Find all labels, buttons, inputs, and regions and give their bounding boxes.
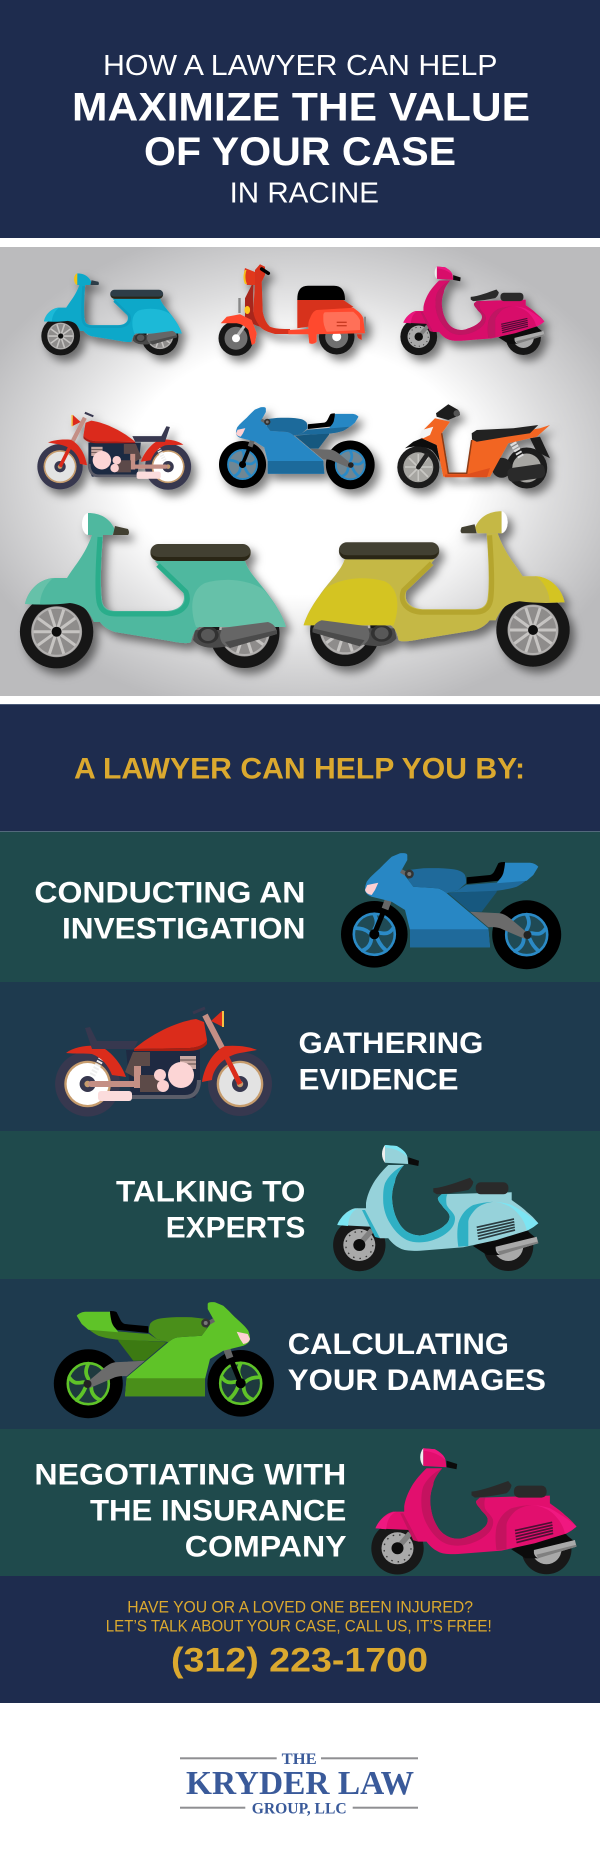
text: gathering evidence: EVIDENCE bbox=[298, 1063, 458, 1096]
icon: pink scooter bbox=[400, 267, 544, 355]
logo: the kryder law group: KRYDER LAW bbox=[186, 1765, 414, 1802]
text: call to action bbox=[106, 1597, 492, 1635]
panel: gathering evidence bbox=[0, 982, 600, 1131]
text: calculating your damages: YOUR DAMAGES bbox=[288, 1364, 546, 1397]
icon: blue sport bike bbox=[341, 853, 561, 969]
text: talking to experts: EXPERTS bbox=[166, 1212, 305, 1245]
title: line 1: HOW A LAWYER CAN HELP bbox=[103, 50, 498, 82]
logo: the kryder law group: GROUP, LLC bbox=[252, 1800, 347, 1817]
panel: subheading bbox=[0, 704, 600, 832]
panel: conducting an investigation bbox=[0, 831, 600, 982]
icon: red motorcycle bbox=[55, 1008, 272, 1116]
title: line 2: MAXIMIZE THE VALUE bbox=[72, 86, 530, 130]
text: negotiating with the insurance company bbox=[34, 1458, 347, 1564]
text: call to action: LET’S TALK ABOUT YOUR CASE, CALL US, IT’S FREE! bbox=[106, 1616, 492, 1635]
icon: light blue scooter bbox=[333, 1145, 538, 1271]
text: negotiating with the insurance company: COMPANY bbox=[185, 1531, 347, 1564]
text: calculating your damages: CALCULATING bbox=[288, 1328, 509, 1361]
text: call to action: HAVE YOU OR A LOVED ONE BEEN INJURED? bbox=[127, 1597, 473, 1616]
icon: red scooter bbox=[218, 264, 366, 356]
text: talking to experts: TALKING TO bbox=[116, 1176, 305, 1209]
icon: blue scooter bbox=[41, 273, 182, 355]
icon: blue sport bike bbox=[219, 407, 375, 489]
panel: call to action bbox=[0, 1576, 600, 1703]
panel: calculating your damages bbox=[0, 1279, 600, 1429]
panel: header bbox=[0, 0, 600, 238]
text: conducting an investigation: CONDUCTING AN bbox=[34, 877, 305, 910]
text: conducting an investigation: INVESTIGATION bbox=[62, 913, 305, 946]
icon: teal scooter bbox=[20, 513, 286, 668]
icon: green sport bike bbox=[54, 1302, 274, 1418]
panel: negotiating with the insurance company bbox=[0, 1429, 600, 1576]
text: gathering evidence bbox=[298, 1027, 483, 1096]
subheading text: A LAWYER CAN HELP YOU BY: bbox=[74, 752, 525, 785]
text: calculating your damages bbox=[288, 1328, 546, 1397]
logo: the kryder law group: THE bbox=[282, 1751, 317, 1768]
panel: talking to experts bbox=[0, 1131, 600, 1279]
text: conducting an investigation bbox=[34, 877, 305, 946]
text: negotiating with the insurance company: THE INSURANCE bbox=[90, 1494, 346, 1527]
phone number: (312) 223-1700 bbox=[171, 1642, 428, 1680]
panel: motorcycle collection bbox=[0, 247, 600, 696]
title: line 3: OF YOUR CASE bbox=[144, 130, 456, 174]
icon: orange scooter bbox=[397, 404, 550, 488]
text: negotiating with the insurance company: NEGOTIATING WITH bbox=[34, 1458, 346, 1491]
icon: pink scooter bbox=[371, 1448, 576, 1575]
text: gathering evidence: GATHERING bbox=[298, 1027, 483, 1060]
logo: the kryder law group bbox=[180, 1751, 418, 1817]
icon: red motorcycle bbox=[37, 413, 191, 490]
title: line 4: IN RACINE bbox=[230, 178, 379, 210]
icon: yellow scooter bbox=[304, 511, 570, 667]
text: talking to experts bbox=[116, 1176, 305, 1245]
